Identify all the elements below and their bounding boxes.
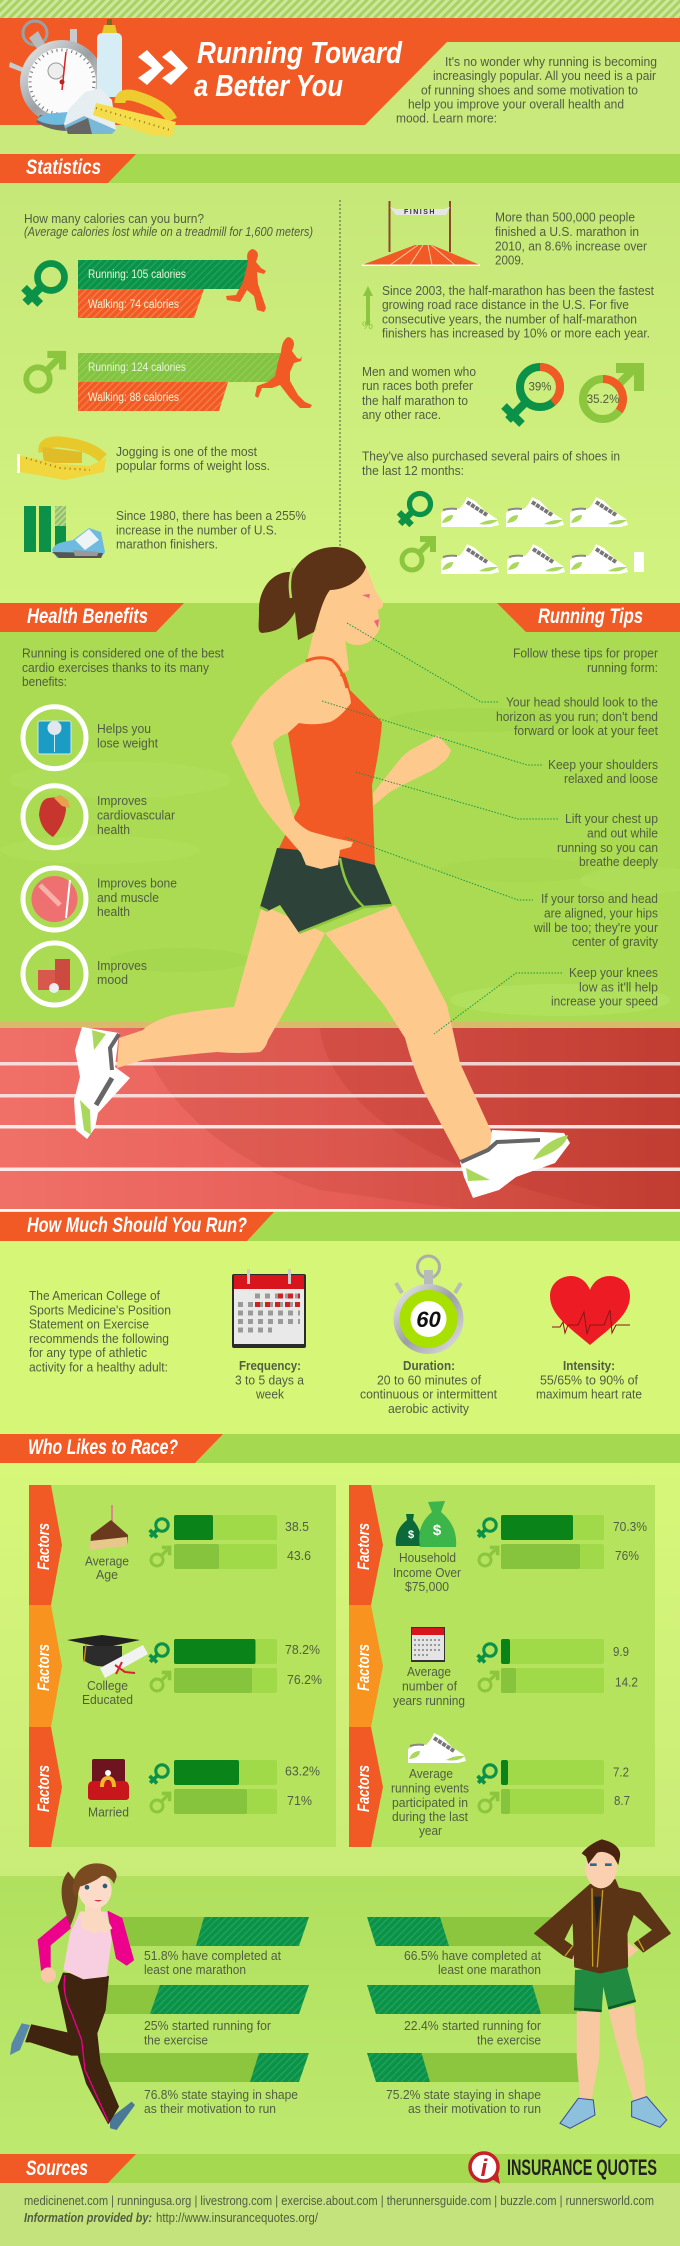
text: jogging: popular forms of weight loss. [116,458,270,473]
text: health benefits intro [22,646,224,689]
title [194,35,403,103]
bars: men [367,1917,586,2082]
hair tie [290,568,293,598]
pictogram: female shoes [399,494,628,527]
text: men and women: any other race. [362,407,441,422]
benefit: cardiovascular health: health [97,822,130,837]
heading: Statistics: Statistics [26,156,101,179]
icon: heart with pulse [550,1276,630,1345]
tip: head: forward or look at your feet [514,723,658,738]
heading: Running Tips: Running Tips [538,605,643,628]
pictogram: male shoes [402,536,644,574]
right shoe [632,2097,667,2127]
factor tab [349,1727,383,1847]
bar: female running [78,260,250,289]
hair [582,1839,620,1865]
heading: How Much Should You Run? [0,1212,680,1241]
icon: finish line: FINISH [404,209,436,216]
benefit: mood [23,943,147,1005]
icon: scale [23,707,86,769]
rear leg [117,905,325,1068]
benefit: bone and muscle: Improves bone [97,876,177,891]
heading: Sources [0,2154,680,2183]
intro text [396,54,657,126]
text: women stats: 76.8% state staying in shape [144,2087,298,2102]
text: frequency: 3 to 5 days a [235,1372,305,1388]
text: men and women: run races both prefer [362,378,474,393]
heading: Who Likes to Race?: Who Likes to Race? [28,1436,178,1459]
bar: male walking [78,382,228,411]
chart: male donut 35.2% [583,363,644,419]
text: health benefits intro: Running is considered one of the best [22,646,224,661]
chart: male donut 35.2%: 35.2% [587,394,619,406]
face [78,1872,112,1908]
icon: muscle [23,868,86,930]
text: frequency [235,1358,305,1402]
bar: female walking [78,289,204,318]
shorts [260,848,392,933]
row: college educated: College [87,1678,128,1693]
figure: woman runner [10,1863,135,2130]
text: tips intro: Follow these tips for proper [513,646,659,661]
icon: money bags: $ [408,1529,414,1541]
factor tab: Factors [354,1644,373,1691]
chart: female donut 39%: 39% [528,382,552,394]
benefit: bone and muscle: health [97,904,130,919]
text: tips intro [513,646,659,675]
icon: money bags: $ [433,1522,442,1539]
tip: head: Your head should look to the [506,695,658,710]
panel: left factors [29,1485,336,1847]
text: 500,000 finishers: 2009. [495,252,524,268]
text: intensity [536,1358,642,1402]
tip: torso: will be too; they're your [533,920,659,935]
text: jogging [116,444,270,473]
row: college educated [82,1639,322,1707]
row: college educated: Educated [82,1692,133,1707]
rear arm [373,735,451,806]
text: intensity: Intensity: [563,1358,615,1373]
text: ACSM statement [29,1288,171,1374]
text: men stats: the exercise [477,2032,541,2048]
text: men and women: the half marathon to [362,393,468,408]
lips and eye [362,594,379,628]
benefit: cardiovascular health [23,786,176,848]
tip: knees: increase your speed [551,994,658,1009]
shorts [574,1966,636,2012]
row: running events: participated in [392,1795,468,1810]
row: average age: 43.6 [287,1548,311,1563]
title: Running Toward [197,35,403,70]
right leg [608,2005,646,2100]
calories question: (Average calories lost while on a treadmill for 1,600 meters) [24,224,313,239]
factor tab: Factors [34,1765,53,1812]
title: a Better You [194,68,343,103]
row: running events: running events [391,1780,469,1796]
text: tips intro: running form: [587,660,658,675]
tip: knees: low as it'll help [579,980,658,995]
row: years running: Average [407,1664,451,1679]
tip: chest: running so you can [557,840,658,855]
tip: chest [557,811,658,869]
text: ACSM statement: The American College of [29,1288,160,1303]
icon: chevrons [138,50,188,85]
bar: male walking: Walking: 88 calories [88,392,179,404]
row: years running: 14.2 [615,1675,638,1690]
text: half-marathon: growing road race distance in the U.S. For five [382,297,629,312]
left leg [577,2012,600,2100]
text: men and women [362,364,476,422]
text: shoes purchased: They've also purchased several pairs of shoes in [362,449,620,464]
text: duration: aerobic activity [388,1401,469,1416]
row: running events: during the last [392,1809,468,1824]
tip: knees: Keep your knees [569,965,658,980]
text: half-marathon: consecutive years, the number of half-marathon [382,312,637,326]
row: married: Married [88,1805,129,1820]
heading: How Much Should You Run?: How Much Should You Run? [27,1214,247,1237]
row: years running [393,1639,638,1708]
text: duration [360,1358,497,1416]
icon: measuring tape [17,442,106,480]
row: years running: 9.9 [613,1644,629,1659]
row: college educated: 76.2% [287,1672,322,1687]
face [585,1848,617,1888]
text: ACSM statement: Statement on Exercise [29,1316,149,1332]
benefit: lose weight: lose weight [97,736,158,750]
row: married: 71% [287,1793,312,1808]
icon: ring box [88,1759,129,1800]
text: health benefits intro: benefits: [22,674,67,689]
tip: shoulders: relaxed and loose [564,771,658,786]
pants stripe [64,1975,108,2122]
text: ACSM statement: Sports Medicine's Position [29,1302,171,1318]
benefit: cardiovascular health: cardiovascular [97,808,176,822]
zipper and cuffs [565,1888,644,1967]
factor tab [349,1485,383,1605]
benefit: cardiovascular health: Improves [97,793,147,808]
text: 255% increase: increase in the number of U.S. [116,522,277,538]
row: average age: Average [85,1554,129,1569]
row: running events: 8.7 [614,1793,630,1808]
intro text: It's no wonder why running is becoming [445,54,657,69]
icon: female runner silhouette [226,249,266,312]
row: married [88,1760,320,1820]
figure: main runner [74,547,570,1198]
chest and hand [80,1912,112,1933]
hair [259,547,366,640]
text: 500,000 finishers: 2010, an 8.6% increase over [495,238,648,254]
jacket undershirt [594,1897,602,1930]
bar: female walking: Walking: 74 calories [88,299,179,311]
row: running events: 7.2 [613,1765,629,1780]
text: 500,000 finishers [495,210,648,268]
tip: shoulders: Keep your shoulders [548,757,658,772]
arm and shoulder [231,662,353,869]
text: frequency: week [255,1386,284,1402]
intro text: help you improve your overall health and [408,96,624,112]
text: men stats: 66.5% have completed at [404,1948,541,1963]
text: women stats: 25% started running for [144,2018,272,2033]
row: college educated: 78.2% [285,1642,320,1657]
text: shoes purchased: the last 12 months: [362,463,464,478]
row: household income [393,1515,647,1594]
bar: male running [78,353,285,382]
shorts hem [574,2001,636,2011]
text: women stats: as their motivation to run [144,2101,276,2116]
row: average age: 38.5 [285,1519,309,1534]
heading: Health Benefits: Health Benefits [27,605,148,628]
tank strap [306,658,347,688]
hands [568,1942,638,1962]
text: sources list: Information provided by: [24,2210,152,2225]
text: women stats: least one marathon [144,1962,246,1977]
text: 255% increase: Since 1980, there has been a 255% [116,508,306,523]
row: household income: $75,000 [405,1579,449,1594]
chart: marathon finisher bars with shoe [24,506,105,558]
leader lines [322,623,562,1034]
text: women stats [144,1948,298,2116]
icon: graduation cap and diploma [67,1635,148,1678]
hair top [73,1863,117,1898]
benefit: lose weight [23,707,158,769]
front shoe [110,2102,135,2130]
tip: chest: breathe deeply [579,854,658,869]
intro text: mood. Learn more: [396,111,497,126]
icon: candles [23,943,86,1005]
face [316,567,383,645]
text: ACSM statement: activity for a healthy adult: [29,1360,168,1374]
heading: Sources: Sources [26,2157,88,2180]
row: running events: year [419,1823,443,1838]
benefit: bone and muscle [23,868,177,930]
icon: calendar [232,1269,306,1348]
tip: chest: Lift your chest up [565,811,658,826]
right sleeve [108,1912,133,1965]
row: years running: years running [393,1693,465,1708]
text: women stats: 51.8% have completed at [144,1948,281,1963]
calories question [24,211,313,239]
mouth [94,1900,102,1902]
text: duration: continuous or intermittent [360,1386,497,1402]
text: sources list [24,2193,654,2225]
eyes [590,1863,612,1866]
row: years running: number of [402,1678,457,1694]
text: health benefits intro: cardio exercises thanks to its many [22,660,209,675]
row: married: 63.2% [285,1764,320,1779]
text: intensity: 55/65% to 90% of [540,1372,638,1388]
icon: money bags [396,1501,456,1547]
icon: up arrow with percent [362,286,373,332]
ponytail [62,1872,78,1927]
title banner [0,18,680,125]
bar: female running: Running: 105 calories [88,269,186,281]
neck [85,1902,101,1917]
icon: male symbol [26,351,66,391]
icon: small calendar [411,1627,445,1662]
illustration: stopwatch, bottle, shoes and tape [9,19,176,137]
text: duration: Duration: [403,1358,455,1373]
jacket [535,1880,670,1973]
lower hand [41,1967,56,1983]
tip: head: horizon as you run; don't bend [496,709,658,724]
logo: Insurance Quotes: i [481,2155,489,2182]
panel: men vs women stats band [0,1876,680,2154]
text: half-marathon: finishers has increased by 10% or more each year. [382,326,650,341]
intro text: of running shoes and some motivation to [421,82,638,98]
back shoe [10,2023,30,2055]
text: men stats: 22.4% started running for [404,2018,542,2033]
benefit: mood: mood [97,972,128,987]
track [0,1022,680,1212]
text: men stats: 75.2% state staying in shape [386,2087,541,2102]
tip: torso: center of gravity [572,934,658,949]
tank top [278,658,382,865]
intro text: increasingly popular. All you need is a pair [433,68,657,83]
icon: anatomical heart [23,786,86,848]
factor tab: Factors [34,1644,53,1691]
factor tab [349,1605,383,1727]
panel: right factors [349,1485,655,1847]
factor tab [29,1727,62,1847]
calories question: How many calories can you burn? [24,211,204,226]
logo: Insurance Quotes [470,2153,657,2184]
text: frequency: Frequency: [239,1358,301,1373]
tip: torso: If your torso and head [541,891,658,906]
left sleeve [38,1915,70,1970]
heading: Running Tips [497,603,680,632]
benefit: bone and muscle: and muscle [97,890,159,905]
text: women stats: the exercise [144,2032,208,2048]
factor tab [29,1605,62,1727]
neck [306,630,349,680]
top stripe [0,0,680,18]
chart: female donut 39% [504,367,560,424]
bar: male running: Running: 124 calories [88,362,186,374]
icon: white shoe [408,1733,466,1763]
text: ACSM statement: for any type of athletic [29,1345,147,1360]
text: men stats: least one marathon [438,1962,541,1977]
dotted divider [339,200,341,547]
text: men stats: as their motivation to run [408,2101,541,2116]
bars: women [100,1917,309,2082]
row: average age: Age [96,1567,118,1582]
row: household income: Income Over [393,1565,462,1580]
icon: female symbol [24,264,64,304]
tip: shoulders [548,757,658,786]
tip: knees [551,965,658,1009]
row: household income: 76% [615,1548,639,1563]
icon: male runner silhouette [255,337,312,408]
shorts trim [260,858,392,933]
icon: cake [90,1505,128,1550]
eyes [85,1884,107,1890]
factor tab: Factors [34,1523,53,1570]
tip: torso: are aligned, your hips [544,906,658,921]
text: intensity: maximum heart rate [536,1386,642,1402]
heading: Health Benefits [0,603,184,632]
front leg [325,905,492,1160]
grass background [0,603,680,1024]
benefit: lose weight: Helps you [97,721,151,736]
icon: up arrow with percent: % [362,320,373,332]
text: jogging: Jogging is one of the most [116,444,257,459]
row: household income: Household [399,1550,456,1565]
row: household income: 70.3% [613,1519,647,1534]
top [63,1912,112,1979]
text: ACSM statement: recommends the following [29,1331,169,1346]
text: men stats [386,1948,542,2116]
text: sources list: http://www.insurancequotes.org/ [156,2210,318,2225]
text: shoes purchased [362,449,620,478]
heading: Who Likes to Race? [0,1434,680,1463]
text: duration: 20 to 60 minutes of [377,1372,481,1388]
left shoe [560,2098,595,2128]
heading: Statistics [0,154,680,183]
text: men and women: Men and women who [362,364,476,379]
factor tab: Factors [354,1523,373,1570]
factor tab [29,1485,62,1605]
row: average age [85,1515,311,1582]
text: 255% increase: marathon finishers. [116,536,218,552]
text: half-marathon: Since 2003, the half-marathon has been the fastest [382,283,654,298]
tip: chest: and out while [587,826,658,841]
text: 255% increase [116,508,306,552]
icon: stopwatch 60: 60 [416,1307,441,1332]
benefit: mood: Improves [97,958,147,973]
rear shoe [74,1027,130,1139]
front shoe [460,1130,570,1198]
pants [26,1973,118,2123]
text: 500,000 finishers: finished a U.S. marathon in [495,224,639,239]
tip: head [496,695,658,738]
icon: stopwatch 60 [394,1256,464,1354]
figure: man [535,1839,670,2128]
tip: torso [533,891,659,949]
panel: calories [24,211,313,411]
text: 500,000 finishers: More than 500,000 people [495,210,635,225]
text: half-marathon [382,283,654,341]
row: running events [391,1760,630,1838]
row: running events: Average [409,1766,453,1781]
icon: finish line [362,201,480,266]
factor tab: Factors [354,1765,373,1812]
